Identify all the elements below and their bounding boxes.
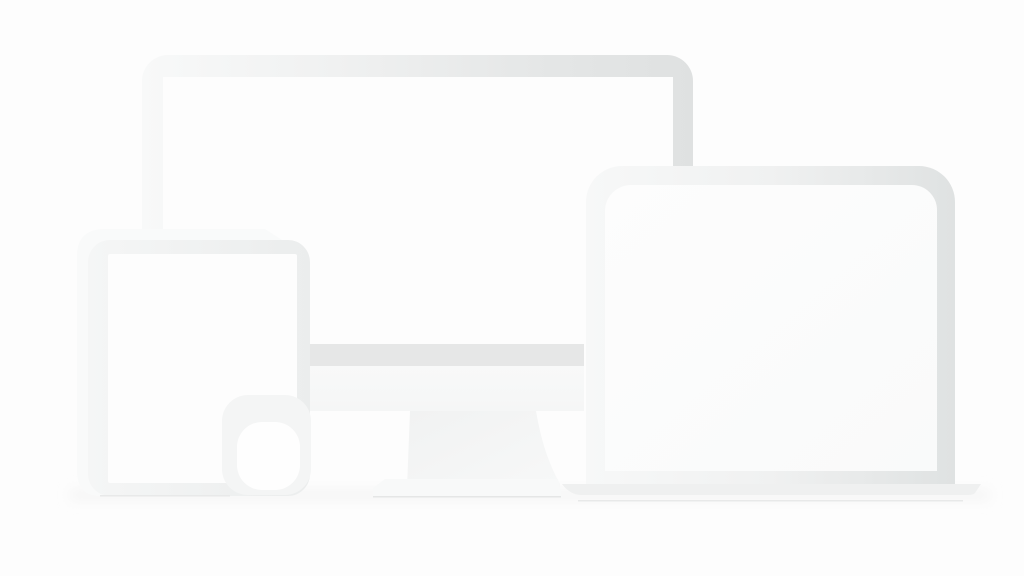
floor shadow [70, 490, 990, 500]
monitor bezel [142, 55, 693, 240]
monitor chin band [300, 344, 584, 366]
tablet bezel [88, 240, 310, 496]
tablet [77, 229, 310, 496]
tablet back edge [77, 229, 290, 496]
tablet screen [108, 254, 297, 483]
watch [222, 395, 311, 495]
laptop base [562, 484, 981, 495]
laptop base underside [578, 500, 963, 502]
watch body [222, 395, 311, 495]
laptop [562, 166, 981, 502]
monitor stand [407, 411, 560, 488]
laptop screen [605, 185, 937, 471]
monitor [142, 55, 693, 498]
monitor base [373, 479, 562, 497]
monitor screen [163, 77, 673, 344]
tablet bottom shadow [100, 495, 230, 496]
monitor lower body [300, 366, 584, 411]
watch screen [237, 422, 300, 490]
laptop lid [586, 166, 955, 486]
